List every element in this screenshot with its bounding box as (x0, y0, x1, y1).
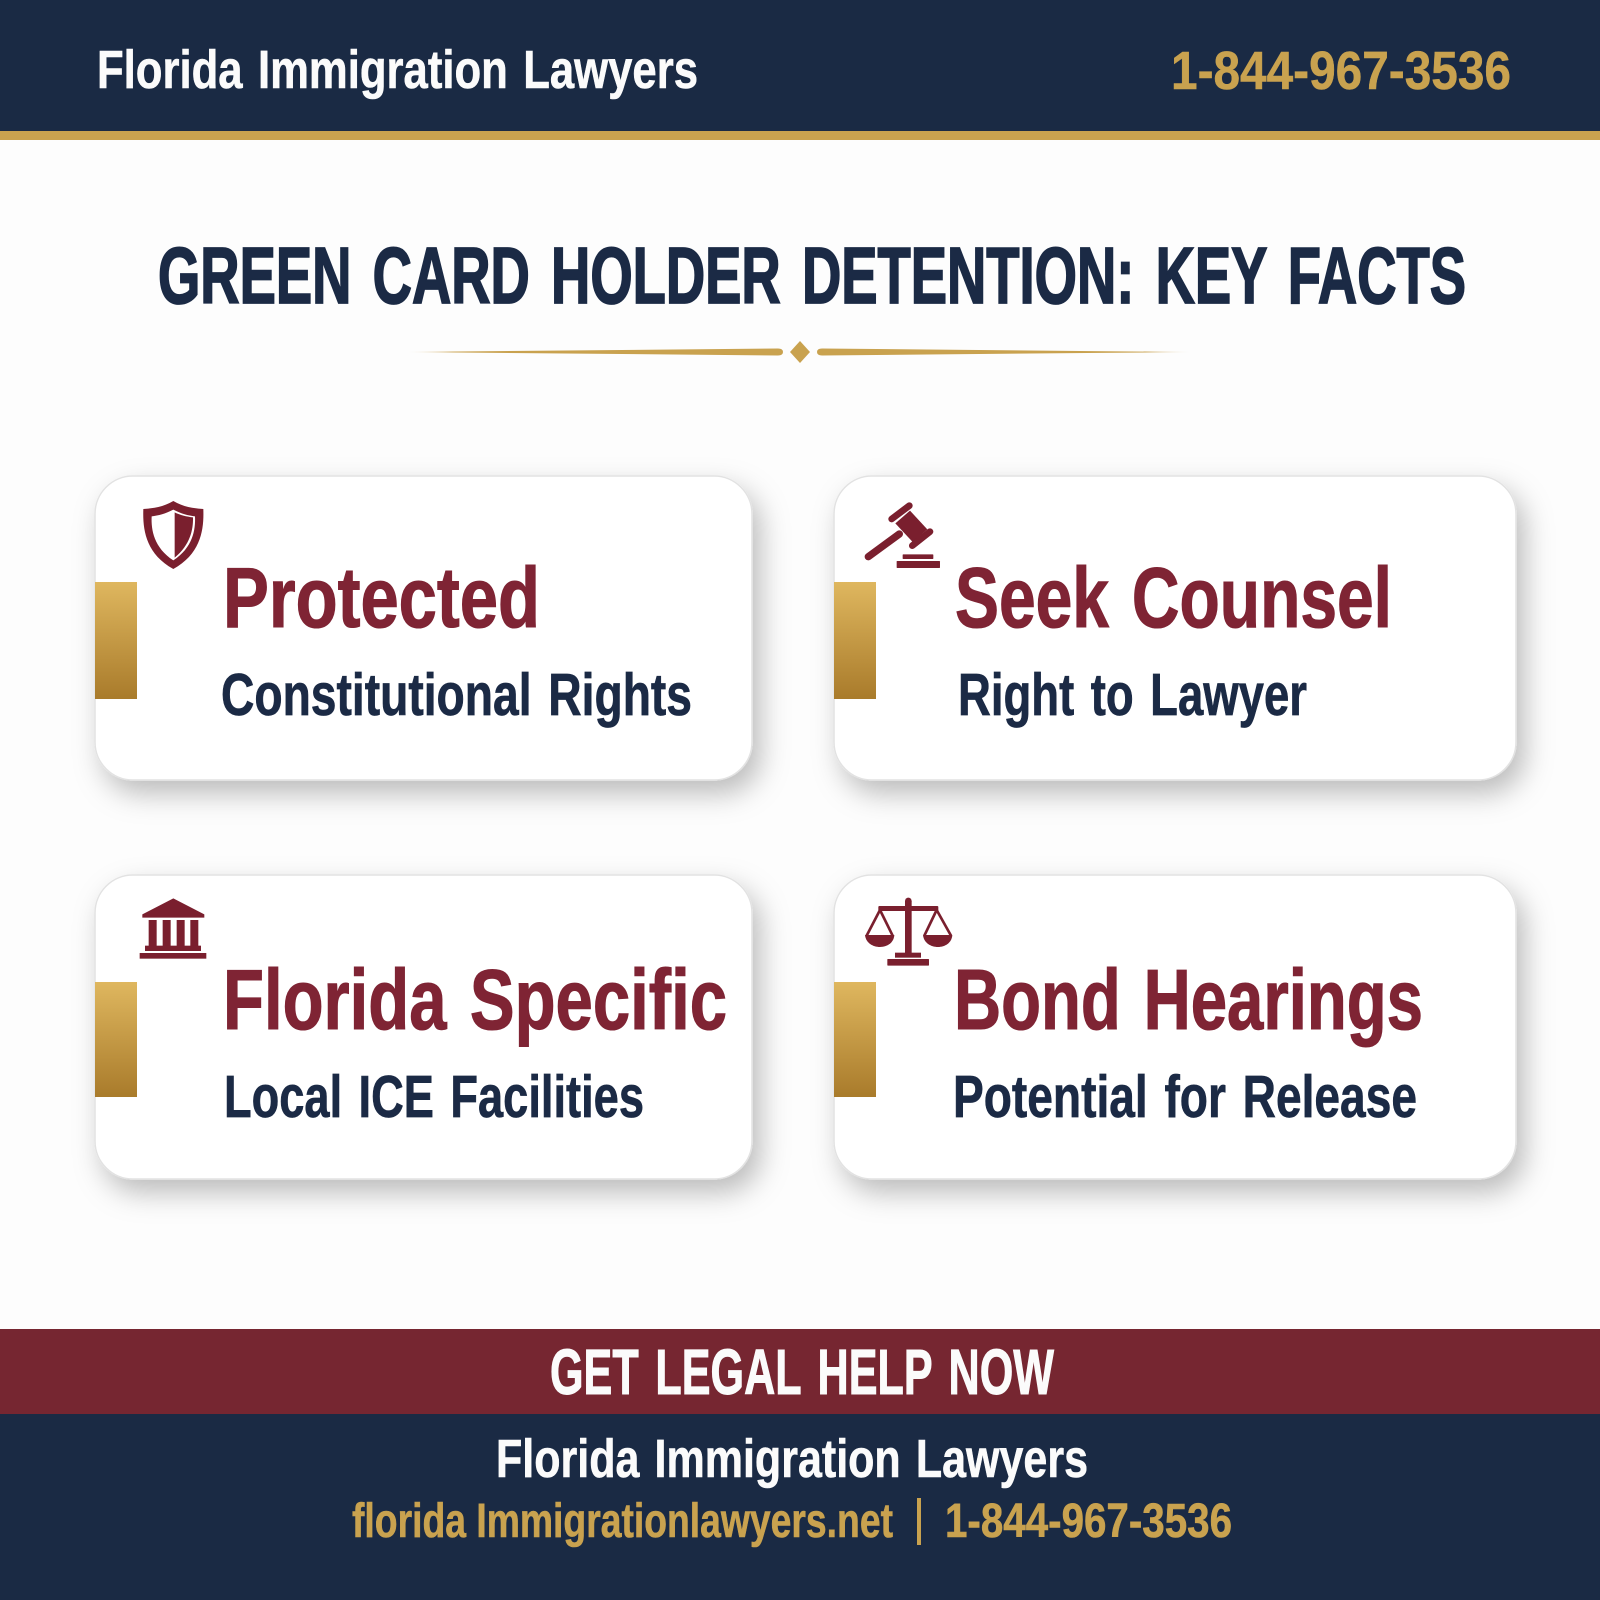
footer phone number: 1-844-967-3536 (945, 1495, 1232, 1548)
gold accent bar (834, 982, 876, 1097)
gold accent bar (834, 582, 876, 699)
heading: florida specific: Florida Specific (223, 953, 727, 1048)
heading: protected: Protected (223, 551, 540, 646)
icon: shield (143, 501, 203, 569)
icon: scales of justice (865, 898, 952, 966)
icon: gavel (868, 506, 940, 568)
panel: florida specific (95, 875, 752, 1179)
footer website: florida Immigrationlawyers.net (352, 1495, 893, 1548)
subheading: potential for release: Potential for Release (953, 1064, 1417, 1130)
gold accent bar (95, 582, 137, 699)
panel: protected (95, 476, 752, 780)
gold accent bar (95, 982, 137, 1097)
heading: seek counsel: Seek Counsel (955, 551, 1392, 646)
footer firm name: Florida Immigration Lawyers (496, 1429, 1088, 1489)
icon: courthouse (140, 898, 206, 959)
panel: seek counsel (834, 476, 1516, 780)
header phone number: 1-844-967-3536 (1171, 41, 1511, 101)
subheading: right to lawyer: Right to Lawyer (958, 662, 1307, 728)
call to action band (0, 1329, 1600, 1414)
call to action text: GET LEGAL HELP NOW (550, 1336, 1054, 1408)
footer (0, 1414, 1600, 1600)
header bar (0, 0, 1600, 140)
subheading: constitutional rights: Constitutional Rights (221, 662, 692, 728)
title divider with diamond (408, 341, 1190, 363)
panel: bond hearings (834, 875, 1516, 1179)
footer separator (917, 1498, 921, 1545)
subheading: local ice facilities: Local ICE Facilities (224, 1064, 644, 1130)
heading: bond hearings: Bond Hearings (954, 953, 1423, 1048)
header firm name: Florida Immigration Lawyers (97, 40, 698, 100)
